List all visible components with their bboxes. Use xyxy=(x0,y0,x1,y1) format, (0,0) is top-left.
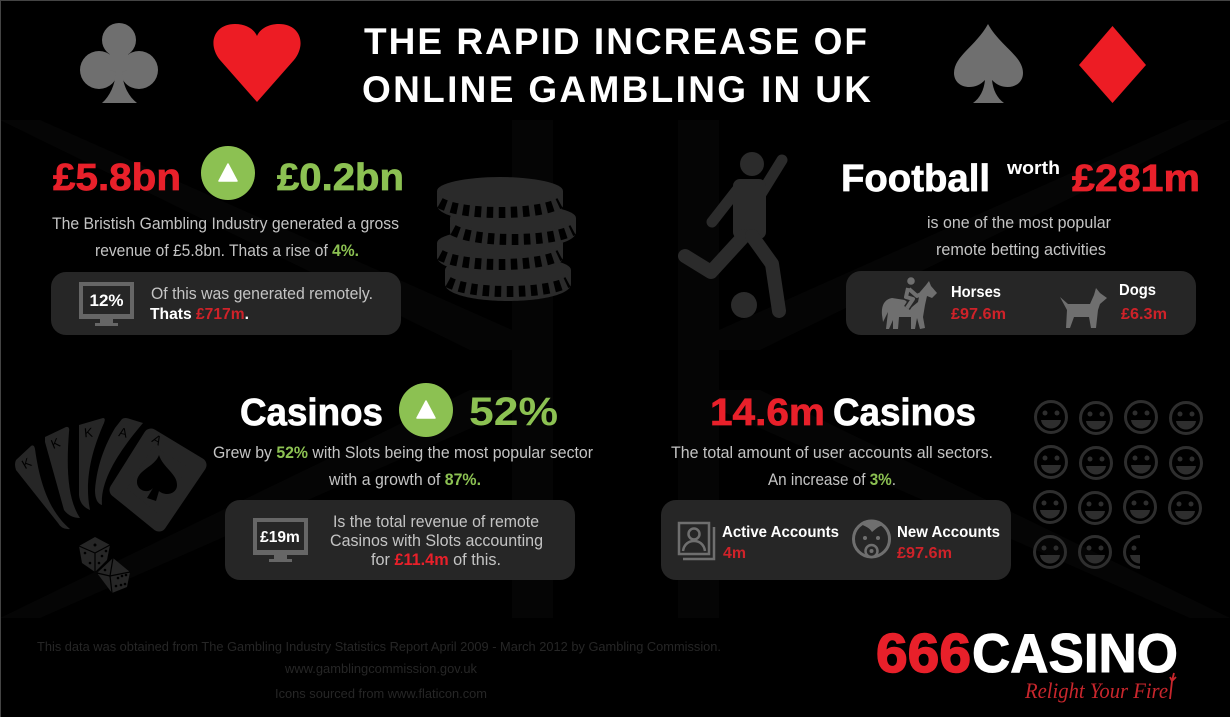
icon: smiley grid xyxy=(1034,402,1202,568)
callout text xyxy=(330,512,543,569)
callout text xyxy=(150,284,373,323)
stat: 14.6m: 14.6m xyxy=(710,392,825,434)
icon: playing cards: K xyxy=(19,454,34,472)
description: with a growth of 87%. xyxy=(328,470,481,489)
description xyxy=(671,443,993,489)
stat: 5.8bn: £5.8bn xyxy=(53,157,181,199)
label: new accounts: New Accounts xyxy=(897,524,1000,541)
label: active accounts: Active Accounts xyxy=(722,524,839,541)
title xyxy=(362,21,871,110)
icon: green up arrow xyxy=(399,383,453,437)
panel: industry revenue xyxy=(51,146,404,335)
description xyxy=(927,213,1111,259)
icon: playing cards: K xyxy=(49,435,63,452)
footer: sources xyxy=(37,639,721,701)
label: dogs: Dogs xyxy=(1119,282,1156,299)
description: The total amount of user accounts all sectors. xyxy=(671,443,993,462)
label: dogs xyxy=(1119,282,1167,323)
icon: football player xyxy=(685,152,782,318)
title: ONLINE GAMBLING IN UK xyxy=(362,69,871,110)
icon: dice xyxy=(79,537,130,593)
icon: horse and rider xyxy=(882,277,937,329)
description: Grew by 52% with Slots being the most popular sector xyxy=(213,443,593,462)
panel: user accounts xyxy=(661,392,1011,580)
icon: playing cards: A xyxy=(150,431,165,448)
description: remote betting activities xyxy=(936,240,1106,259)
logo: 666 casino xyxy=(876,622,1178,703)
callout: account types xyxy=(661,500,1011,580)
icon: contact card xyxy=(679,523,714,559)
label: horses: Horses xyxy=(951,284,1001,301)
heading: casinos: Casinos xyxy=(833,392,976,434)
label: worth: worth xyxy=(1006,158,1060,178)
label: new accounts: £97.6m xyxy=(897,545,952,562)
description xyxy=(52,214,399,260)
icon: monitor 19m xyxy=(253,518,308,562)
background: faint flag pattern xyxy=(0,120,1230,618)
logo: 666 casino: Relight Your Fire xyxy=(1024,678,1168,703)
title: THE RAPID INCREASE OF xyxy=(364,21,867,62)
icon: coin stack xyxy=(437,177,576,301)
logo: 666 casino: CASINO xyxy=(972,622,1178,684)
icon: dog xyxy=(1060,288,1107,328)
callout text: Is the total revenue of remote xyxy=(333,512,539,531)
callout text: for £11.4m of this. xyxy=(371,550,501,569)
description: An increase of 3%. xyxy=(768,470,896,489)
label: horses xyxy=(951,284,1006,323)
logo: 666 casino: 666 xyxy=(876,622,971,684)
label: dogs: £6.3m xyxy=(1121,306,1167,323)
icon: club xyxy=(80,23,158,103)
callout text: Casinos with Slots accounting xyxy=(330,531,543,550)
description: revenue of £5.8bn. Thats a rise of 4%. xyxy=(95,241,359,260)
heading: casinos: Casinos xyxy=(240,392,383,434)
stat: 52%: 52% xyxy=(469,390,558,434)
callout text: Thats £717m. xyxy=(150,306,249,323)
icon: playing cards: K xyxy=(83,425,94,440)
footer: sources: This data was obtained from The Gambling Industry Statistics Report April 2009 - March 2012 by Gambling Commission. xyxy=(37,639,721,654)
description: is one of the most popular xyxy=(927,213,1111,232)
icon: monitor 12% xyxy=(79,282,134,326)
heading: football: Football xyxy=(841,158,990,200)
icon: spade xyxy=(954,24,1023,103)
panel: football xyxy=(841,158,1200,335)
icon: monitor 12%: 12% xyxy=(89,291,124,310)
icon: playing cards: A xyxy=(117,424,129,441)
icon: heart xyxy=(213,24,301,102)
label: active accounts xyxy=(722,524,839,562)
icon: diamond xyxy=(1079,26,1146,103)
description xyxy=(213,443,593,489)
stat: 281m: £281m xyxy=(1072,158,1200,200)
footer: sources: www.gamblingcommission.gov.uk xyxy=(284,661,477,676)
callout text: Of this was generated remotely. xyxy=(151,284,373,303)
stat: 0.2bn: £0.2bn xyxy=(277,157,404,199)
label: horses: £97.6m xyxy=(951,306,1006,323)
icon: monitor 19m: £19m xyxy=(260,529,300,546)
callout: remote share xyxy=(51,272,401,335)
panel: casinos growth xyxy=(213,383,593,580)
icon: baby face xyxy=(854,520,890,557)
label: active accounts: 4m xyxy=(723,545,746,562)
icon: green up arrow xyxy=(201,146,255,200)
footer: sources: Icons sourced from www.flaticon.com xyxy=(275,686,487,701)
callout: horses and dogs xyxy=(846,271,1196,335)
label: new accounts xyxy=(897,524,1000,562)
icon: playing cards xyxy=(15,418,199,529)
callout: casino revenue xyxy=(225,500,575,580)
description: The Bristish Gambling Industry generated a gross xyxy=(52,214,399,233)
